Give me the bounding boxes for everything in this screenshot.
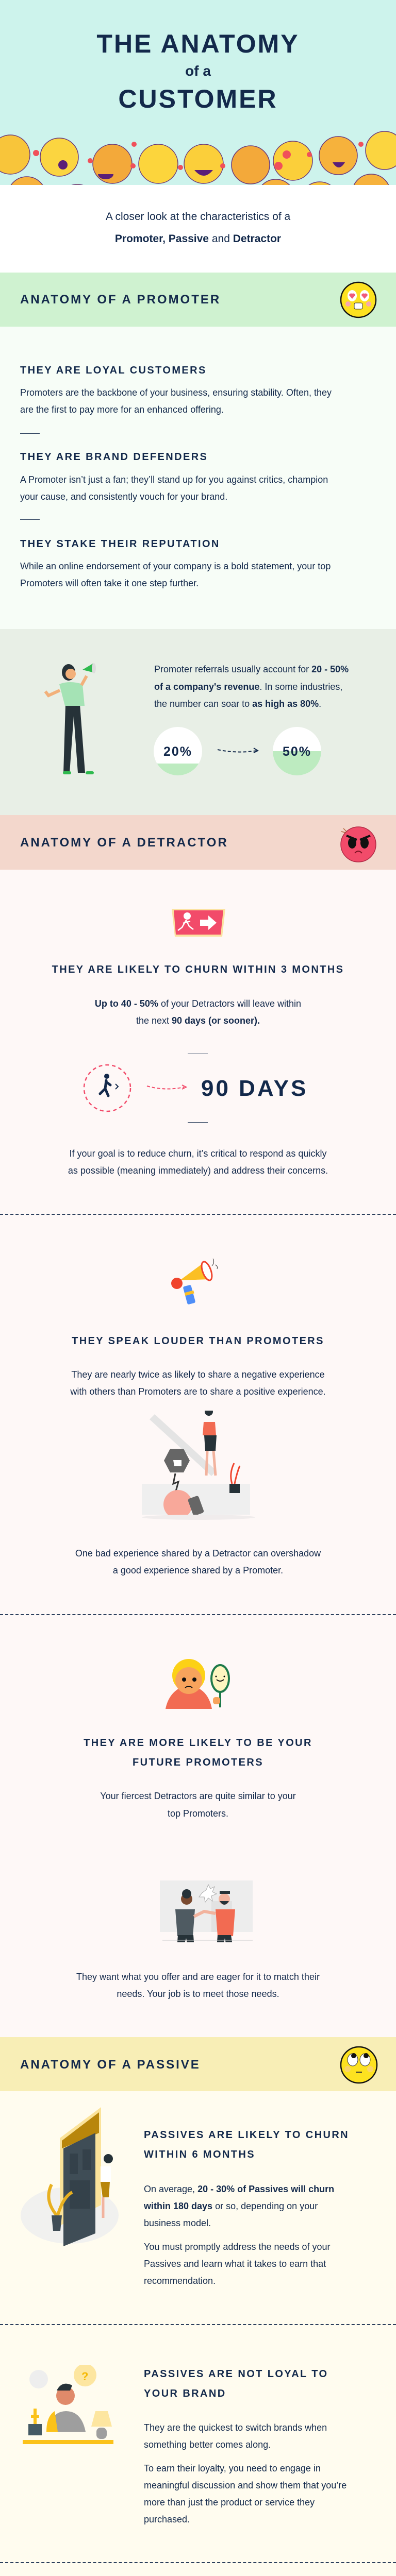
stat text: the number can soar to as high as 80%. [154,699,321,709]
illustration: broken bulb and woman [142,1411,255,1520]
text block: brand defenders [20,451,328,502]
text block: churn within 6 months: recommendation. [144,2276,216,2286]
text: fiercest detractors [100,1791,296,1819]
text block: not loyal: purchased. [144,2514,190,2524]
stat: 90 days: 90 DAYS [201,1076,308,1101]
text: twice as likely: They are nearly twice as likely to share a negative experience [71,1369,325,1380]
text block: not loyal: YOUR BRAND [144,2388,226,2399]
subtitle [106,211,291,245]
text: 40-50%: the next 90 days (or sooner). [136,1015,260,1026]
text block: brand defenders: your cause, and consistently vouch for your brand. [20,492,227,502]
heading: future promoters [84,1737,312,1768]
text block: churn within 6 months: PASSIVES ARE LIKELY TO CHURN [144,2129,349,2141]
illustration: thinking man: ? [81,2370,88,2383]
illustration: woman with megaphone [44,663,96,774]
text block: churn within 6 months: Passives and learn what it takes to earn that [144,2259,326,2269]
heading: future promoters: FUTURE PROMOTERS [133,1757,263,1768]
text block: stake reputation: THEY STAKE THEIR REPUTATION [20,538,220,550]
text: 40-50% [95,998,301,1026]
title: THE ANATOMY [96,29,300,58]
icon: girl with mirror [166,1659,230,1709]
text: bad experience: a good experience shared by a Promoter. [113,1565,283,1575]
text block: not loyal: To earn their loyalty, you need to engage in [144,2463,321,2473]
text: reduce churn [68,1148,328,1176]
text block: not loyal: They are the quickest to switch brands when [144,2422,327,2433]
text block: not loyal [144,2368,346,2524]
illustration: two men handshake [160,1880,253,1942]
icon: eye-roll emoji [340,2046,377,2083]
stat text: of a company's revenue. In some industries, [154,681,342,691]
title: of a [185,63,211,79]
text block: stake reputation: While an online endorsement of your company is a bold statement, your top [20,561,331,571]
text: bad experience [75,1548,321,1575]
text block: loyal customers: are the first to pay more for an enhanced offering. [20,404,224,415]
text block: churn within 6 months: within 180 days or so, depending on your [144,2201,318,2211]
section header: promoter: ANATOMY OF A PROMOTER [20,293,221,307]
subtitle: Promoter, Passive and Detractor [115,233,281,245]
subtitle: A closer look at the characteristics of a [106,211,290,223]
icon: megaphone [171,1258,218,1304]
text block: stake reputation: Promoters will often take it one step further. [20,578,199,588]
title: CUSTOMER [118,84,278,113]
text block: not loyal: something better comes along. [144,2439,271,2450]
text: twice as likely: with others than Promoters are to share a positive experience. [70,1386,326,1397]
text block: loyal customers: Promoters are the backbone of your business, ensuring stability. Often, they [20,387,332,398]
section header: detractor: ANATOMY OF A DETRACTOR [20,836,228,850]
section header: passive: ANATOMY OF A PASSIVE [20,2058,201,2072]
heading: future promoters: THEY ARE MORE LIKELY TO BE YOUR [84,1737,312,1749]
text block: loyal customers [20,365,332,415]
stat text [154,664,349,709]
text block: churn within 6 months [144,2129,349,2286]
text block: brand defenders: THEY ARE BRAND DEFENDERS [20,451,208,463]
illustration: door and woman [21,2107,119,2246]
chart: 20% to 50% circles: 20% [163,744,192,759]
text: reduce churn: If your goal is to reduce churn, it’s critical to respond as quickly [70,1148,326,1159]
text block: not loyal: meaningful discussion and show them that you’re [144,2480,346,2490]
text block: not loyal: PASSIVES ARE NOT LOYAL TO [144,2368,328,2380]
icon: exit sign [172,909,225,937]
icon: walking person in dashed circle [84,1064,188,1112]
chart: 20% to 50% circles [154,727,321,775]
text: reduce churn: as possible (meaning immediately) and address their concerns. [68,1165,328,1176]
text block: churn within 6 months: WITHIN 6 MONTHS [144,2149,255,2160]
text: they want what you offer: They want what you offer and are eager for it to match their [76,1972,320,1982]
text: twice as likely [70,1369,326,1397]
text: fiercest detractors: top Promoters. [168,1808,228,1819]
text block: churn within 6 months: business model. [144,2218,211,2228]
heading: churn within 3 months: THEY ARE LIKELY TO CHURN WITHIN 3 MONTHS [52,964,344,975]
title [96,29,300,113]
text: bad experience: One bad experience shared by a Detractor can overshadow [75,1548,321,1558]
stat text: Promoter referrals usually account for 20 - 50% [154,664,349,674]
text: 40-50%: Up to 40 - 50% of your Detractors will leave within [95,998,301,1009]
icon: heart-eyes emoji [340,281,376,318]
text block: not loyal: more than just the product or service they [144,2497,315,2507]
text: fiercest detractors: Your fiercest Detractors are quite similar to your [100,1791,296,1801]
chart: 20% to 50% circles: 50% [283,744,311,759]
text block: stake reputation [20,538,331,588]
emoji band [0,131,396,185]
text: they want what you offer [76,1972,320,1999]
illustration: thinking man [23,2365,113,2444]
text: they want what you offer: needs. Your job is to meet those needs. [117,1989,279,1999]
text block: churn within 6 months: On average, 20 - 30% of Passives will churn [144,2184,334,2194]
heading: speak louder: THEY SPEAK LOUDER THAN PROMOTERS [72,1335,324,1347]
text block: loyal customers: THEY ARE LOYAL CUSTOMERS [20,365,207,376]
icon: angry emoji [340,826,376,862]
text block: brand defenders: A Promoter isn’t just a fan; they’ll stand up for you against critics, champion [20,474,328,485]
text block: churn within 6 months: You must promptly address the needs of your [144,2242,331,2252]
